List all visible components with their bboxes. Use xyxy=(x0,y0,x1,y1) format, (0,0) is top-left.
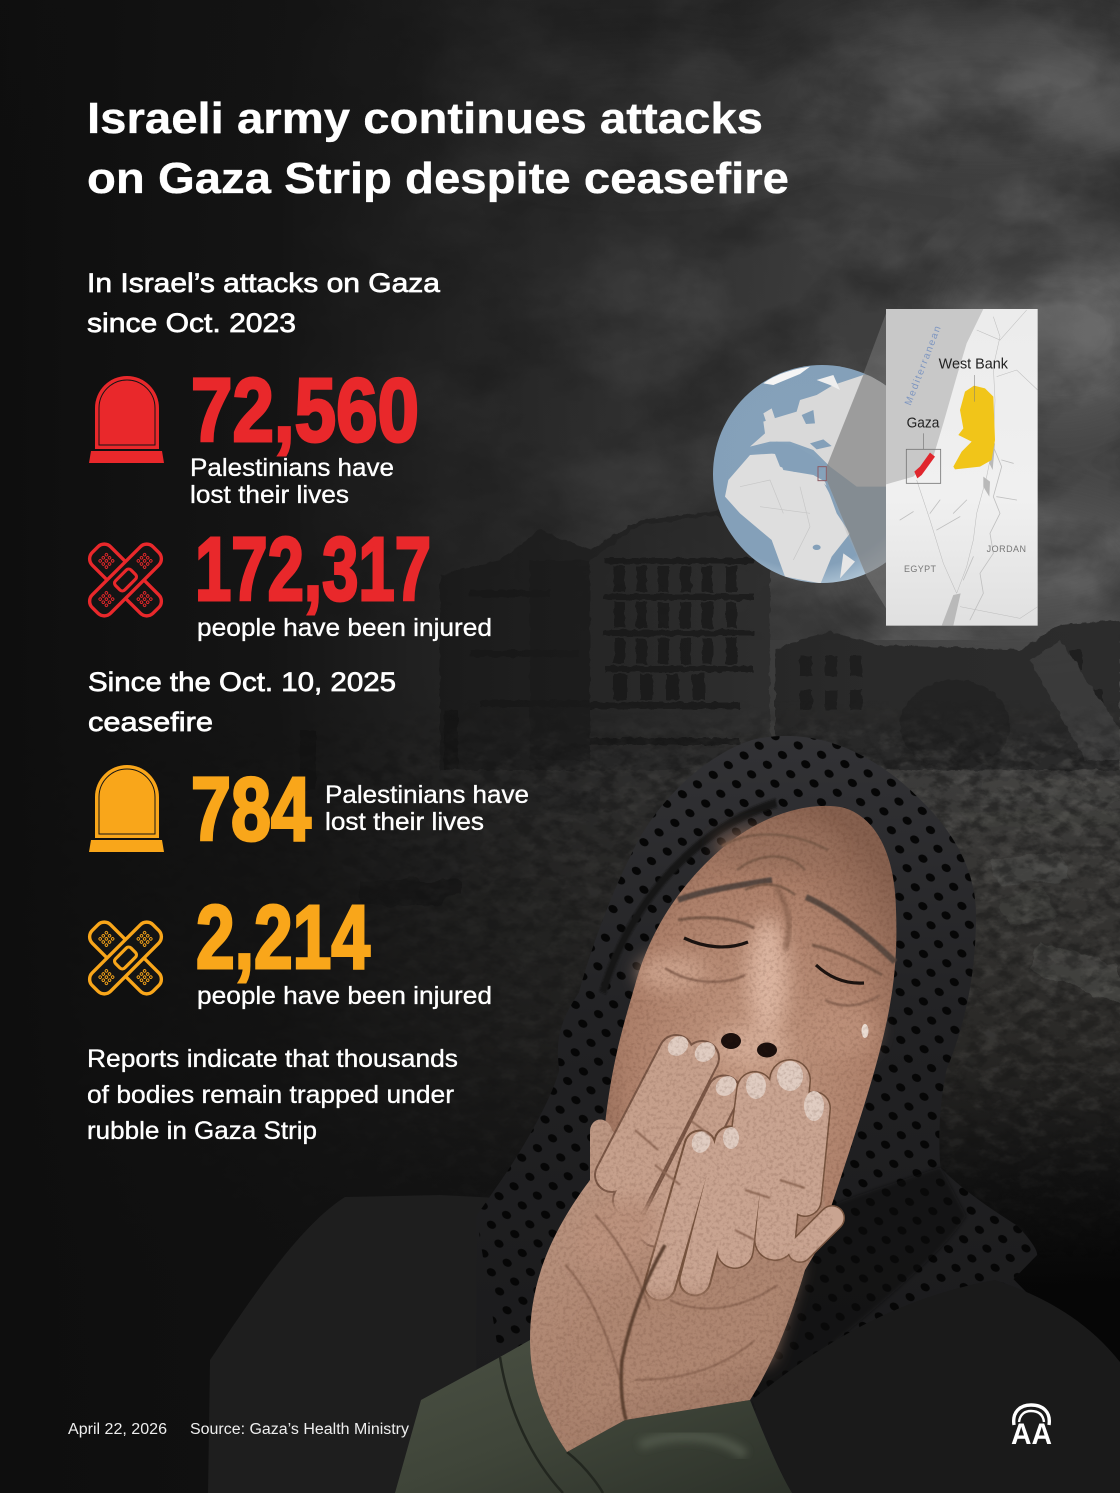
clouds xyxy=(460,20,1120,620)
closed eyes xyxy=(684,938,748,947)
wedge shadow over globe xyxy=(826,374,886,574)
number: 72,560: 72,560 xyxy=(191,361,419,461)
front-hand fingers xyxy=(660,1080,832,1285)
fingernails xyxy=(664,1032,824,1155)
sea xyxy=(886,309,983,484)
knuckle wrinkles xyxy=(565,1120,805,1380)
label: people injured: people have been injured xyxy=(197,982,492,1010)
face xyxy=(605,806,896,1240)
label: lost their lives: Palestinians have xyxy=(190,454,394,482)
stat: deaths since ceasefire xyxy=(89,760,529,860)
heading: since ceasefire: ceasefire xyxy=(88,707,213,737)
stat: injured since ceasefire xyxy=(86,888,492,1010)
label: people injured: people have been injured xyxy=(197,614,492,642)
number: 2,214: 2,214 xyxy=(196,888,370,988)
palm blending xyxy=(565,1184,800,1420)
icon: globe xyxy=(713,365,886,583)
note: bodies under rubble: rubble in Gaza Strip xyxy=(87,1117,317,1145)
woman covering her mouth (photo) xyxy=(208,736,1120,1493)
eyebrows and wrinkles xyxy=(678,880,772,900)
note: bodies under rubble xyxy=(87,1045,458,1145)
number: 172,317: 172,317 xyxy=(195,520,431,620)
map labels: EGYPT xyxy=(904,564,936,574)
tear xyxy=(862,1024,868,1038)
photo background: sky and ruined city xyxy=(234,0,1120,1198)
number: 784: 784 xyxy=(191,760,311,860)
map inset xyxy=(886,309,1038,626)
hands xyxy=(530,1032,836,1452)
label: lost their lives xyxy=(325,781,529,836)
title: on Gaza Strip despite ceasefire xyxy=(87,154,789,203)
heading: since ceasefire: Since the Oct. 10, 2025 xyxy=(88,667,396,697)
sleeve xyxy=(395,1340,792,1493)
footer: date and source: Source: Gaza’s Health Ministry xyxy=(190,1421,409,1438)
footer: date and source: April 22, 2026 xyxy=(68,1421,167,1438)
stat: injured total xyxy=(86,520,492,642)
icon: red gravestone xyxy=(89,376,164,463)
back-hand fingers xyxy=(612,1052,724,1230)
heading: since Oct. 2023: since Oct. 2023 xyxy=(87,308,296,338)
heading: since Oct. 2023: In Israel’s attacks on Gaza xyxy=(87,268,441,298)
cloud shadows xyxy=(300,0,1120,640)
dark jacket right shoulder xyxy=(752,1280,1120,1493)
stat: deaths total xyxy=(89,361,419,509)
dark jacket left shoulder xyxy=(208,1195,640,1493)
note: bodies under rubble: of bodies remain trapped under xyxy=(87,1081,454,1109)
icon: amber bandage xyxy=(86,918,165,998)
label: lost their lives: Palestinians have xyxy=(325,781,529,809)
nostrils xyxy=(721,1033,741,1049)
hand crease between palms xyxy=(621,1245,665,1420)
West Bank xyxy=(953,386,995,469)
map labels: Mediterranean xyxy=(903,325,944,407)
cloud texture xyxy=(300,0,1120,640)
locator map: globe and inset xyxy=(713,309,1038,626)
zoom wedge xyxy=(827,313,886,608)
icon: red bandage xyxy=(86,540,165,620)
rubble texture xyxy=(513,728,1120,1166)
label: lost their lives: lost their lives xyxy=(190,481,349,509)
label: lost their lives: lost their lives xyxy=(325,808,484,836)
headscarf xyxy=(476,736,1119,1492)
icon: amber gravestone xyxy=(89,765,164,852)
logo: AA xyxy=(1011,1405,1052,1451)
skin texture xyxy=(530,806,896,1450)
Gaza xyxy=(914,453,935,478)
map labels xyxy=(903,325,1026,574)
graves and rubble xyxy=(358,780,1120,1005)
title xyxy=(87,94,789,203)
map labels: JORDAN xyxy=(987,544,1026,554)
map labels: West Bank xyxy=(939,357,1009,373)
logo: AA: AA xyxy=(1011,1418,1052,1451)
note: bodies under rubble: Reports indicate that thousands xyxy=(87,1045,458,1073)
title: Israeli army continues attacks xyxy=(87,94,763,143)
ruined buildings xyxy=(300,510,1120,790)
terrain lines xyxy=(917,310,1038,618)
heading: since ceasefire xyxy=(88,667,396,737)
footer: date and source xyxy=(68,1421,409,1438)
heading: since Oct. 2023 xyxy=(87,268,441,338)
label: lost their lives xyxy=(190,454,394,509)
map labels: Gaza xyxy=(907,415,940,431)
